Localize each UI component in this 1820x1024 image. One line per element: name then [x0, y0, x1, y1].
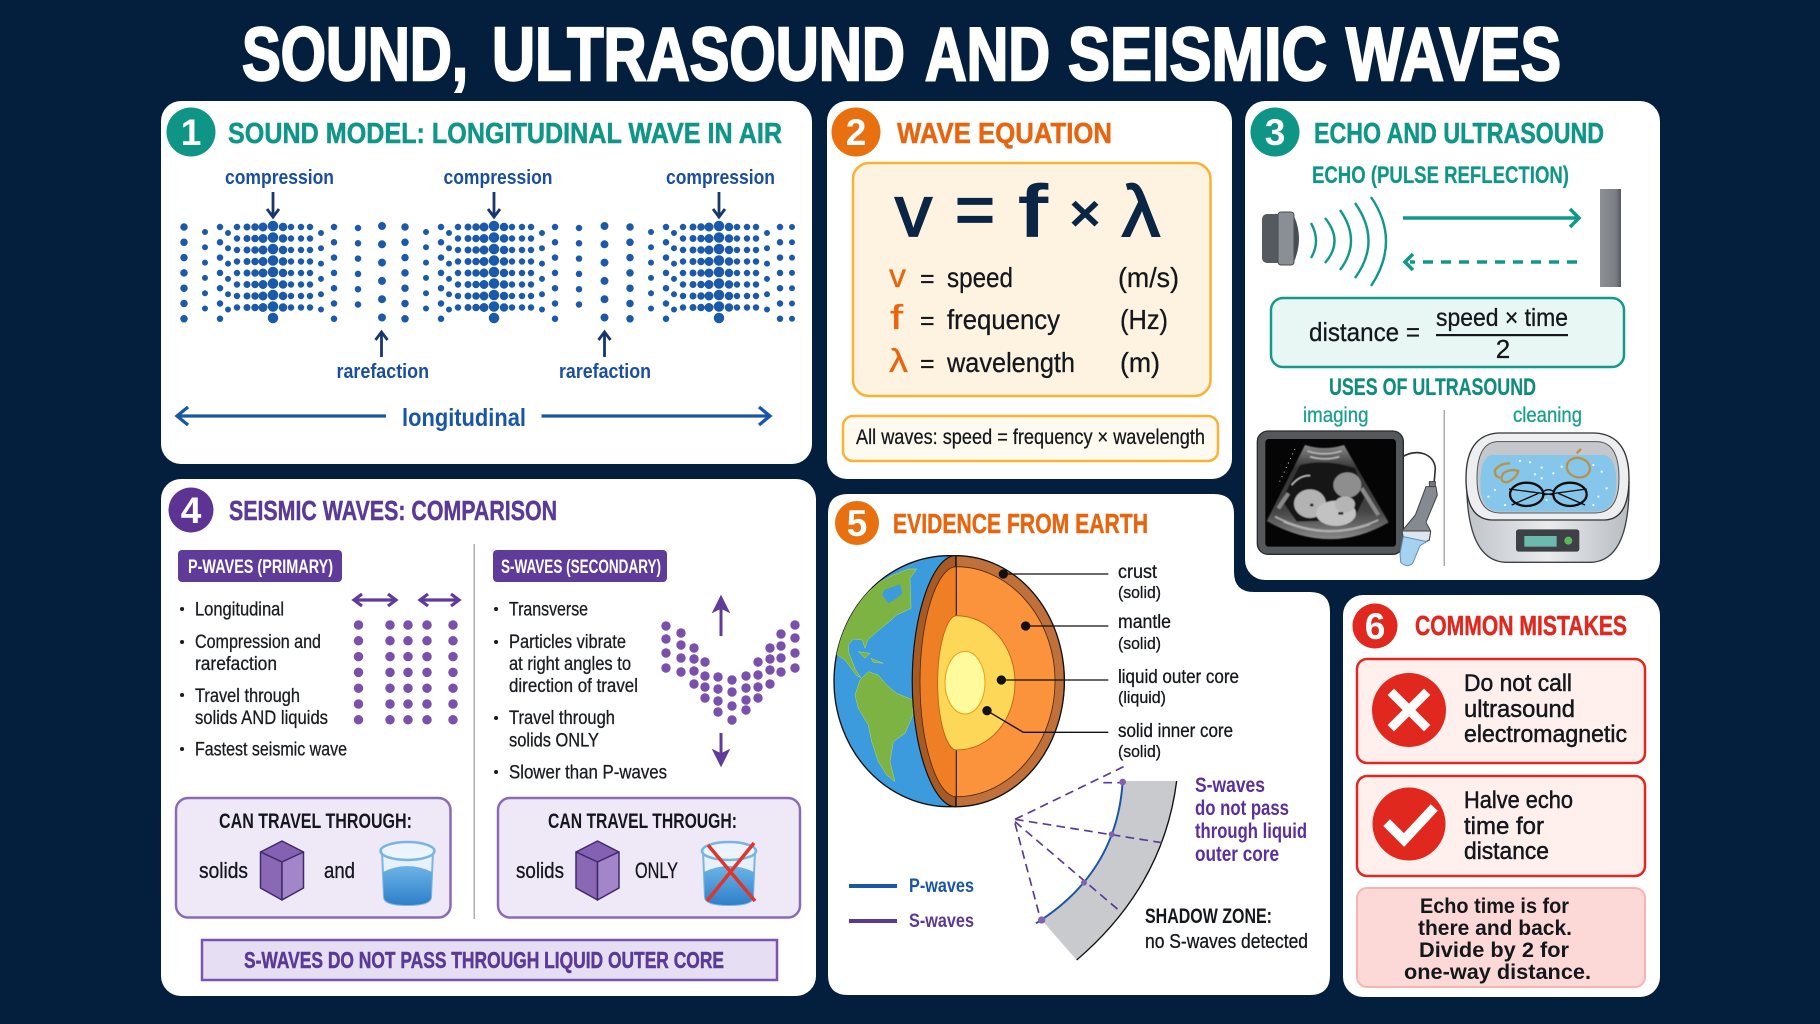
S-wave bullet list	[496, 600, 667, 784]
title: WAVES	[1346, 12, 1561, 96]
badge 4: 4	[181, 490, 202, 531]
legend rows: wavelength	[946, 347, 1075, 378]
icon: solid cube	[260, 841, 304, 900]
legend rows: v	[889, 257, 907, 294]
earth layer labels: (solid)	[1118, 583, 1161, 602]
legend rows: (Hz)	[1120, 304, 1168, 335]
legend: S-waves: S-waves	[909, 911, 974, 932]
S-wave bullet list: direction of travel	[509, 676, 638, 697]
legend: P-waves	[849, 876, 974, 897]
main formula: v	[895, 172, 932, 252]
P-wave bullet list: Longitudinal	[195, 600, 284, 620]
panel: evidence from earth	[828, 494, 1330, 995]
badge 6: 6	[1365, 606, 1385, 647]
badge 1	[166, 108, 216, 156]
title: SEISMIC	[1068, 12, 1327, 96]
P-wave bullet list	[182, 600, 347, 760]
legend rows: =	[920, 350, 935, 378]
main formula	[895, 170, 1160, 252]
subheading: uses: USES OF ULTRASOUND	[1329, 374, 1536, 401]
legend rows	[889, 257, 1179, 379]
badge 2: 2	[846, 112, 866, 153]
shadow zone label: no S-waves detected	[1145, 931, 1308, 953]
S-wave travel box: solids	[516, 858, 564, 883]
earth layer labels: crust	[1118, 562, 1158, 583]
mistake 1: Do not call	[1464, 670, 1572, 697]
compression labels: compression	[225, 167, 334, 189]
scale ticks	[1279, 449, 1295, 482]
S-wave banner	[202, 940, 777, 980]
shadow zone label	[1145, 905, 1308, 953]
P-wave bullet list: Compression and	[195, 632, 321, 653]
main formula: =	[955, 170, 995, 250]
icon: crossed beaker	[702, 842, 756, 905]
tag: P-waves	[178, 550, 342, 582]
S-waves note: outer core	[1195, 843, 1279, 866]
S-wave bullet list: solids ONLY	[509, 730, 599, 752]
icon: beaker of liquid	[380, 842, 434, 905]
legend rows: =	[920, 265, 935, 293]
returning dashed arrow	[1405, 254, 1577, 270]
P-wave direction arrows	[354, 594, 459, 606]
rarefaction labels	[336, 361, 651, 383]
S-waves note: do not pass	[1195, 797, 1289, 820]
title: AND	[925, 12, 1050, 96]
longitudinal arrow: longitudinal	[402, 404, 526, 432]
S-waves note: through liquid	[1195, 820, 1307, 843]
legend rows: speed	[947, 262, 1013, 293]
S-wave travel box	[498, 798, 800, 918]
legend: S-waves	[849, 911, 974, 932]
rarefaction arrows	[376, 332, 610, 357]
all waves note: All waves: speed = frequency × wavelength	[856, 426, 1205, 449]
earth layer labels: (solid)	[1118, 742, 1161, 761]
heading: sound model: SOUND MODEL: LONGITUDINAL WAVE IN AIR	[228, 118, 782, 150]
hudson bay	[882, 584, 902, 603]
S-wave travel box: ONLY	[635, 858, 678, 883]
echo time note: Echo time is for	[1420, 894, 1570, 918]
main formula: ×	[1069, 185, 1101, 243]
P-wave travel box	[176, 798, 450, 918]
particle field	[184, 226, 792, 320]
main formula: λ	[1122, 172, 1160, 252]
water	[1480, 455, 1616, 512]
mistake 2	[1357, 776, 1645, 876]
title: ULTRASOUND	[492, 12, 905, 96]
shadow zone label: SHADOW ZONE:	[1145, 905, 1272, 928]
ultrasound probe	[1400, 482, 1437, 566]
compression labels: compression	[666, 167, 775, 189]
subheading: echo: ECHO (PULSE REFLECTION)	[1312, 162, 1569, 189]
earth cross-section	[834, 556, 1108, 807]
crust	[912, 556, 1064, 807]
P-wave bullet list: Fastest seismic wave	[195, 740, 347, 760]
panel: wave equation	[827, 101, 1232, 479]
all waves note	[843, 416, 1218, 461]
P-wave bullet list: rarefaction	[195, 654, 277, 675]
S-wave bullet list: Travel through	[509, 708, 615, 729]
mistake 2: Halve echo	[1464, 787, 1573, 814]
earth layer labels	[1118, 562, 1239, 761]
S-wave bullet list: Particles vibrate	[509, 632, 626, 653]
heading: wave equation: WAVE EQUATION	[897, 118, 1112, 150]
S-wave bullet list: Transverse	[509, 600, 588, 620]
panel: seismic comparison	[161, 479, 816, 996]
mistake 2: distance	[1464, 838, 1549, 865]
echo time note	[1357, 888, 1645, 987]
label: imaging: imaging	[1303, 404, 1368, 427]
icon: transducer	[1262, 212, 1299, 265]
panel: echo and ultrasound	[1245, 101, 1660, 580]
mistake 1	[1357, 659, 1645, 763]
legend rows: λ	[889, 342, 909, 379]
S-waves note: S-waves	[1195, 774, 1265, 797]
mistake 1: electromagnetic	[1464, 721, 1627, 748]
echo time note: Divide by 2 for	[1419, 938, 1570, 962]
outgoing arrow	[1403, 209, 1579, 227]
outer core	[938, 616, 1015, 750]
badge 4	[168, 488, 214, 532]
legend rows: (m/s)	[1118, 262, 1179, 293]
continents	[835, 569, 917, 782]
compression labels: compression	[444, 167, 552, 189]
heading: seismic waves: SEISMIC WAVES: COMPARISON	[229, 495, 557, 526]
earth layer labels: (solid)	[1118, 634, 1161, 653]
legend rows: frequency	[947, 304, 1060, 335]
mistake 2: time for	[1464, 813, 1544, 840]
gold rings	[1495, 449, 1592, 482]
earth layer labels: liquid outer core	[1118, 667, 1239, 688]
badge 1: 1	[181, 112, 201, 153]
echo formula: speed × time	[1436, 304, 1568, 332]
earth layer labels: solid inner core	[1118, 721, 1233, 742]
icon: check	[1372, 788, 1446, 860]
S-wave bullet list: Slower than P-waves	[509, 762, 667, 784]
legend rows: (m)	[1120, 347, 1160, 378]
glasses	[1509, 483, 1587, 506]
P-wave bullet list: solids AND liquids	[195, 708, 328, 729]
icon: cross	[1372, 673, 1446, 747]
inner core	[945, 651, 985, 714]
heading: common mistakes: COMMON MISTAKES	[1415, 610, 1627, 641]
heading: echo and ultrasound: ECHO AND ULTRASOUND	[1314, 118, 1604, 150]
compression labels	[225, 167, 775, 189]
S-wave particles	[661, 620, 800, 725]
P-wave bullet list: Travel through	[195, 686, 300, 707]
mantle	[920, 567, 956, 797]
echo time note: one-way distance.	[1404, 960, 1591, 984]
S-wave vibration arrows	[715, 598, 727, 764]
badge 5: 5	[847, 503, 867, 544]
S-wave travel box: CAN TRAVEL THROUGH:	[548, 810, 737, 833]
tag: S-waves: S-WAVES (SECONDARY)	[501, 557, 661, 578]
ultrasound scan image	[1267, 445, 1389, 539]
badge 6	[1352, 604, 1398, 648]
P-wave travel box: CAN TRAVEL THROUGH:	[219, 810, 412, 833]
shadow zone diagram	[1015, 766, 1177, 960]
echo formula: 2	[1496, 334, 1510, 364]
icon: ultrasound monitor	[1257, 431, 1437, 566]
S-wave banner: S-WAVES DO NOT PASS THROUGH LIQUID OUTER CORE	[244, 947, 724, 973]
legend: P-waves: P-waves	[909, 876, 974, 897]
echo time note: there and back.	[1418, 916, 1572, 940]
panel: common mistakes	[1343, 595, 1660, 997]
heading: evidence: EVIDENCE FROM EARTH	[893, 508, 1148, 539]
legend rows: f	[890, 299, 904, 337]
tag: S-waves	[493, 550, 667, 582]
longitudinal arrow	[177, 404, 770, 432]
control panel	[1516, 529, 1579, 552]
bubbles	[1488, 461, 1607, 505]
main formula: f	[1019, 172, 1048, 252]
compression arrows	[267, 192, 725, 217]
badge 2	[832, 108, 880, 156]
earth layer labels: mantle	[1118, 612, 1171, 633]
legend rows: =	[920, 307, 935, 335]
echo formula: distance =	[1309, 317, 1420, 347]
badge 3: 3	[1265, 112, 1285, 153]
label: cleaning: cleaning	[1513, 404, 1582, 427]
sound wave arcs	[1311, 197, 1386, 286]
panel: sound model	[161, 101, 812, 464]
mistake 1: ultrasound	[1464, 696, 1575, 723]
S-waves note	[1195, 774, 1307, 866]
P-wave particles	[358, 625, 453, 721]
P-wave travel box: solids	[199, 858, 248, 883]
S-wave bullet list: at right angles to	[509, 654, 631, 675]
badge 5	[835, 501, 879, 545]
reflecting wall	[1600, 189, 1621, 287]
icon: ultrasonic cleaner	[1466, 433, 1629, 562]
leader lines	[987, 574, 1108, 732]
rarefaction labels: rarefaction	[336, 361, 429, 383]
echo formula	[1271, 298, 1624, 367]
earth layer labels: (liquid)	[1118, 688, 1166, 707]
tag: P-waves: P-WAVES (PRIMARY)	[188, 557, 333, 578]
P-wave travel box: and	[324, 858, 355, 883]
rarefaction labels: rarefaction	[559, 361, 651, 383]
badge 3	[1250, 108, 1300, 156]
title: SOUND,	[242, 12, 468, 96]
icon: solid cube	[576, 841, 619, 900]
formula box	[853, 163, 1210, 396]
